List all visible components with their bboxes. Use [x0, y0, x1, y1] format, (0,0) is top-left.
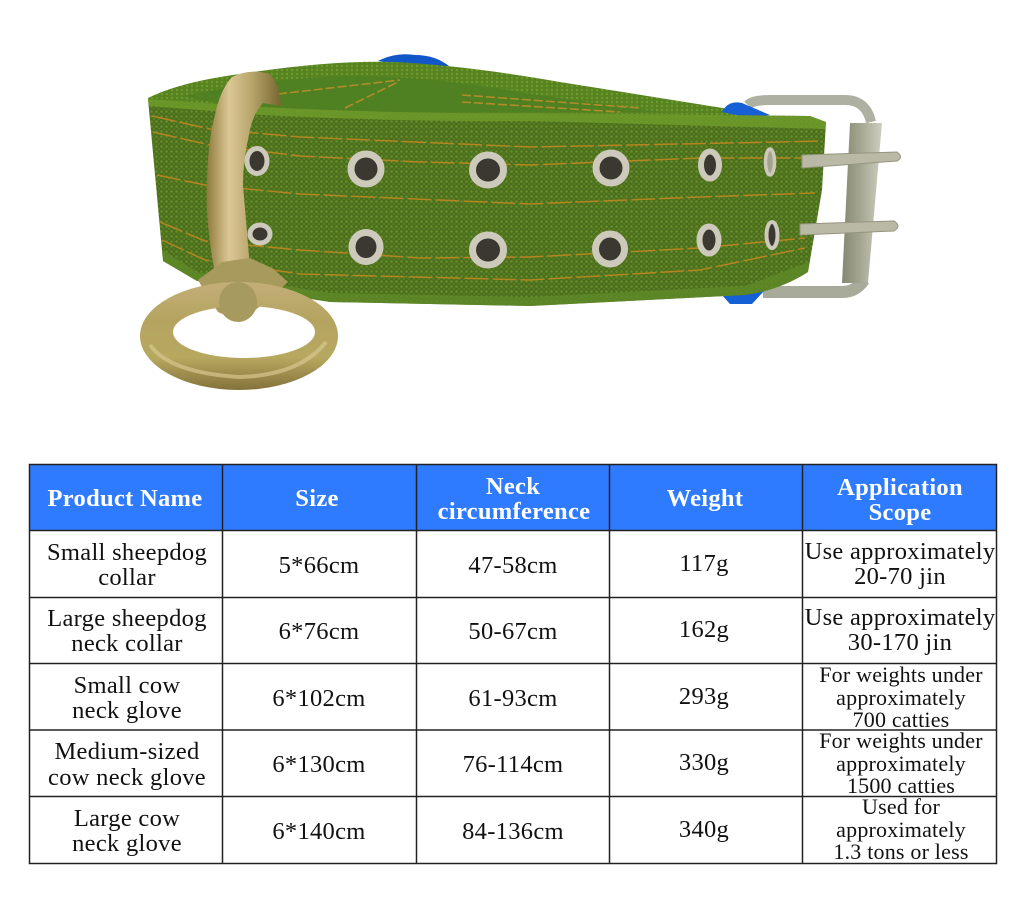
header row: Size: [295, 485, 339, 512]
row: small sheepdog collar: 117g: [679, 550, 729, 577]
row: medium-sized cow neck glove: For weights under: [819, 728, 983, 753]
row: small cow neck glove: [72, 662, 983, 732]
row: small cow neck glove: approximately: [836, 685, 966, 710]
row: large sheepdog neck collar: Use approximately: [805, 604, 996, 631]
buckle prongs: [800, 152, 900, 235]
blue loop at back of collar: [378, 54, 449, 68]
row: small sheepdog collar: [47, 538, 996, 591]
row: large sheepdog neck collar: 162g: [679, 616, 729, 643]
row: large cow neck glove: [72, 794, 969, 864]
row: small sheepdog collar: 47-58cm: [468, 552, 558, 579]
row: large sheepdog neck collar: neck collar: [71, 630, 183, 657]
O-ring: [140, 282, 338, 390]
row: small cow neck glove: 6*102cm: [272, 685, 366, 712]
band lower shading: [163, 250, 809, 306]
row: medium-sized cow neck glove: [48, 728, 983, 798]
row: large cow neck glove: 340g: [679, 816, 729, 843]
header row: Weight: [667, 485, 744, 512]
row: large cow neck glove: approximately: [836, 817, 966, 842]
row: large cow neck glove: neck glove: [72, 830, 182, 857]
row: large cow neck glove: Large cow: [74, 805, 180, 832]
row: large sheepdog neck collar: 6*76cm: [279, 618, 359, 645]
row: medium-sized cow neck glove: 76-114cm: [463, 751, 563, 778]
orange stitching: [152, 116, 820, 280]
row: small sheepdog collar: 20-70 jin: [854, 563, 946, 590]
row: medium-sized cow neck glove: 330g: [679, 749, 729, 776]
row: large sheepdog neck collar: 30-170 jin: [848, 629, 952, 656]
blue strap under buckle: [722, 102, 770, 118]
row: large cow neck glove: Used for: [862, 794, 940, 819]
header row: Scope: [869, 499, 931, 526]
product photo: green collar with rings and buckle: [140, 54, 900, 390]
row: small cow neck glove: 293g: [679, 683, 729, 710]
row: large cow neck glove: 1.3 tons or less: [833, 839, 969, 864]
header row: Application: [837, 474, 963, 501]
row: small cow neck glove: 700 catties: [853, 707, 949, 732]
back strap of collar: [148, 62, 735, 125]
row: medium-sized cow neck glove: cow neck glove: [48, 764, 206, 791]
metal eyelets: [247, 148, 778, 265]
row: large cow neck glove: 84-136cm: [462, 818, 564, 845]
row: small cow neck glove: neck glove: [72, 697, 182, 724]
D-ring: [207, 72, 281, 268]
row: medium-sized cow neck glove: 6*130cm: [272, 751, 366, 778]
row: medium-sized cow neck glove: Medium-sized: [54, 738, 200, 765]
swivel bolt: [219, 282, 257, 322]
spec table: [29, 464, 997, 864]
row: small sheepdog collar: 5*66cm: [279, 552, 359, 579]
row: medium-sized cow neck glove: approximately: [836, 751, 966, 776]
row: small sheepdog collar: Use approximately: [805, 538, 996, 565]
row: large sheepdog neck collar: 50-67cm: [468, 618, 558, 645]
light top edge of band: [148, 99, 826, 129]
row: large sheepdog neck collar: [47, 604, 996, 657]
O-ring highlight: [150, 342, 326, 377]
row: small cow neck glove: For weights under: [819, 662, 983, 687]
row: small cow neck glove: 61-93cm: [468, 685, 558, 712]
header row: [29, 464, 996, 530]
header row: Product Name: [48, 485, 202, 512]
row: small cow neck glove: Small cow: [74, 672, 180, 699]
row: small sheepdog collar: collar: [98, 564, 156, 591]
row: large cow neck glove: 6*140cm: [272, 818, 366, 845]
header row: circumference: [438, 498, 590, 525]
collar front band: [148, 99, 826, 306]
row: small sheepdog collar: Small sheepdog: [47, 539, 207, 566]
row: large sheepdog neck collar: Large sheepdog: [47, 605, 207, 632]
inner side of collar: [182, 76, 660, 112]
buckle frame: [748, 100, 882, 292]
row: medium-sized cow neck glove: 1500 catties: [847, 773, 955, 798]
swivel connector: [198, 258, 288, 322]
header row: Neck: [486, 473, 540, 500]
inner stitching: [278, 80, 640, 112]
